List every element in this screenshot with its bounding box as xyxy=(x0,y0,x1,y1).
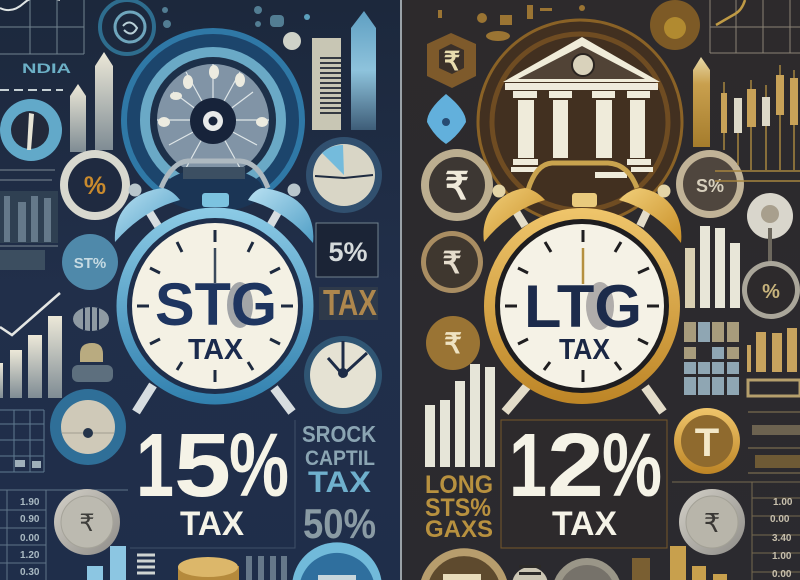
bottom gold bars xyxy=(670,546,727,580)
icon: rupee shield xyxy=(427,33,476,88)
data table: 1.90 xyxy=(20,497,40,508)
frame around 15% xyxy=(130,420,295,548)
icon: gold coin lower-left xyxy=(426,316,480,370)
label: INDIA: NDIA xyxy=(22,60,71,76)
icon: coin with glyph xyxy=(60,150,130,220)
panel: LTG right side xyxy=(421,0,800,580)
icon: donut gauge xyxy=(0,99,62,161)
icon: silver rupee coin xyxy=(679,489,745,555)
table xyxy=(0,410,44,472)
icon: coin stack xyxy=(178,557,239,580)
bells xyxy=(483,188,545,242)
data table: 0.90 xyxy=(20,514,40,525)
small bar icon xyxy=(137,555,155,573)
text: TAX: TAX xyxy=(559,334,611,366)
tick marks xyxy=(137,230,293,382)
text: STG: STG xyxy=(155,271,277,338)
tick marks xyxy=(505,230,659,382)
label: SROCK CAPTIL TAX: SROCK xyxy=(302,421,376,447)
icon: top ring emblem xyxy=(100,0,154,54)
label: LONG STS% GAINS: LONG xyxy=(425,471,493,499)
handle xyxy=(528,163,637,190)
bank building xyxy=(503,37,660,178)
gold arrow column xyxy=(693,57,710,147)
scattered icons xyxy=(162,6,310,50)
data table: 0.00 xyxy=(20,533,40,544)
icon: bottom-left coin xyxy=(421,548,507,580)
data table: 1.20 xyxy=(20,550,40,561)
text: TAX: TAX xyxy=(188,334,244,366)
data table right: 1.00 xyxy=(772,551,792,562)
dashed rule xyxy=(0,89,63,91)
icon: big dial wheel xyxy=(121,28,305,212)
box: 5%: 5% xyxy=(328,237,368,267)
icon: percent coin xyxy=(742,261,800,319)
rising arrow bars xyxy=(70,52,113,152)
bar chart: cream xyxy=(425,364,495,467)
icon: percent coin: % xyxy=(762,281,780,303)
panel: long-term background xyxy=(400,0,800,580)
icon: gold T coin xyxy=(674,408,740,474)
box: 5% xyxy=(316,223,378,277)
icon: coin with glyph: % xyxy=(84,172,106,200)
panel: STG left side xyxy=(0,0,382,580)
box: TAX tag: TAX xyxy=(323,282,377,323)
case xyxy=(116,208,314,404)
label: LONG STS% GAINS: GAXS xyxy=(425,516,493,543)
data table right: 3.40 xyxy=(772,533,792,544)
small table strip xyxy=(632,558,650,580)
icon: pin gauge xyxy=(747,193,793,262)
icon: temple medallion xyxy=(477,19,683,225)
icon: pie chart xyxy=(306,137,382,213)
colored table xyxy=(684,322,739,395)
stat: 12%: 2 xyxy=(547,416,604,516)
icon: blue drop xyxy=(427,94,466,144)
label: SROCK CAPTIL TAX: CAPTIL xyxy=(305,447,375,470)
data table: 0.30 xyxy=(20,567,40,578)
label: 5% stat: 50% xyxy=(303,500,376,547)
icon: silver rupee coin: ₹ xyxy=(704,508,720,538)
label: SROCK CAPTIL TAX xyxy=(302,421,376,499)
icon: gold coin top-left: ₹ xyxy=(442,247,462,280)
case xyxy=(484,208,680,404)
chart grid top left xyxy=(0,0,84,54)
feet xyxy=(505,385,663,412)
barcode panel xyxy=(312,38,341,130)
stat: 15%: % xyxy=(229,416,289,516)
strip icon xyxy=(748,380,800,396)
panel divider xyxy=(400,0,402,580)
icon: rupee shield: ₹ xyxy=(444,46,460,76)
text: LTG: LTG xyxy=(524,273,642,340)
bars: cream xyxy=(685,226,740,308)
hand shadow xyxy=(227,282,253,328)
bottom blue bars xyxy=(87,546,126,580)
icon: blue ring dial xyxy=(50,389,126,465)
icon: silver bottom coin xyxy=(554,558,620,580)
icon: S coin: S% xyxy=(696,176,724,196)
bell posts xyxy=(145,205,282,226)
label: LONG STS% GAINS xyxy=(425,471,493,543)
blue arrow column xyxy=(351,11,376,130)
icon: gold coin top-left xyxy=(421,231,483,293)
scattered gold icons xyxy=(438,5,585,41)
chart grid top right xyxy=(710,0,800,53)
top button xyxy=(572,193,597,207)
icon: rupee coin: ₹ xyxy=(445,166,469,208)
icon: blue bottom badge xyxy=(293,542,381,580)
data table right: 0.00 xyxy=(772,569,792,580)
data table xyxy=(0,490,128,580)
panel: short-term background xyxy=(0,0,400,580)
icon: rupee coin xyxy=(421,149,493,221)
badge: ST% xyxy=(62,234,118,290)
icon: STG alarm clock xyxy=(115,161,313,412)
icon: small rupee coin xyxy=(513,565,547,580)
icon: silver coin: ₹ xyxy=(79,510,95,537)
text table xyxy=(748,412,800,473)
frame around 12% xyxy=(501,420,667,548)
stat: 15%: 1 xyxy=(136,416,174,516)
icon: shield cluster xyxy=(72,307,113,382)
stat: 15%: 5 xyxy=(174,416,231,516)
label: SROCK CAPTIL TAX: TAX xyxy=(308,466,371,499)
badge: ST%: ST% xyxy=(74,255,106,272)
icon: LTG alarm clock xyxy=(483,163,681,412)
icon: gold medallion xyxy=(650,0,700,50)
icon: S coin xyxy=(676,150,744,218)
chart stripes xyxy=(246,556,287,580)
candlestick chart xyxy=(715,65,800,181)
label: LONG STS% GAINS: STS% xyxy=(425,494,491,522)
stat: 12%: % xyxy=(602,416,662,516)
label: TAX: TAX xyxy=(552,505,617,543)
hand shadow xyxy=(586,282,614,330)
icon: silver coin xyxy=(54,489,120,555)
label: TAX: TAX xyxy=(180,505,244,543)
feet xyxy=(136,385,292,412)
icon: gold coin lower-left: ₹ xyxy=(444,328,462,359)
mini chart xyxy=(0,170,58,270)
data table right xyxy=(672,482,800,580)
icon: small clock xyxy=(304,336,382,414)
handle xyxy=(161,161,268,188)
bells xyxy=(115,188,180,242)
top button xyxy=(202,193,229,207)
data table right: 1.00 xyxy=(773,497,793,508)
mini gold bars xyxy=(747,328,797,372)
bar chart with arrow xyxy=(0,293,62,398)
bell posts xyxy=(512,205,650,226)
stat: 12%: 1 xyxy=(509,416,547,516)
icon: gold T coin: T xyxy=(695,421,719,465)
data table right: 0.00 xyxy=(770,514,790,525)
